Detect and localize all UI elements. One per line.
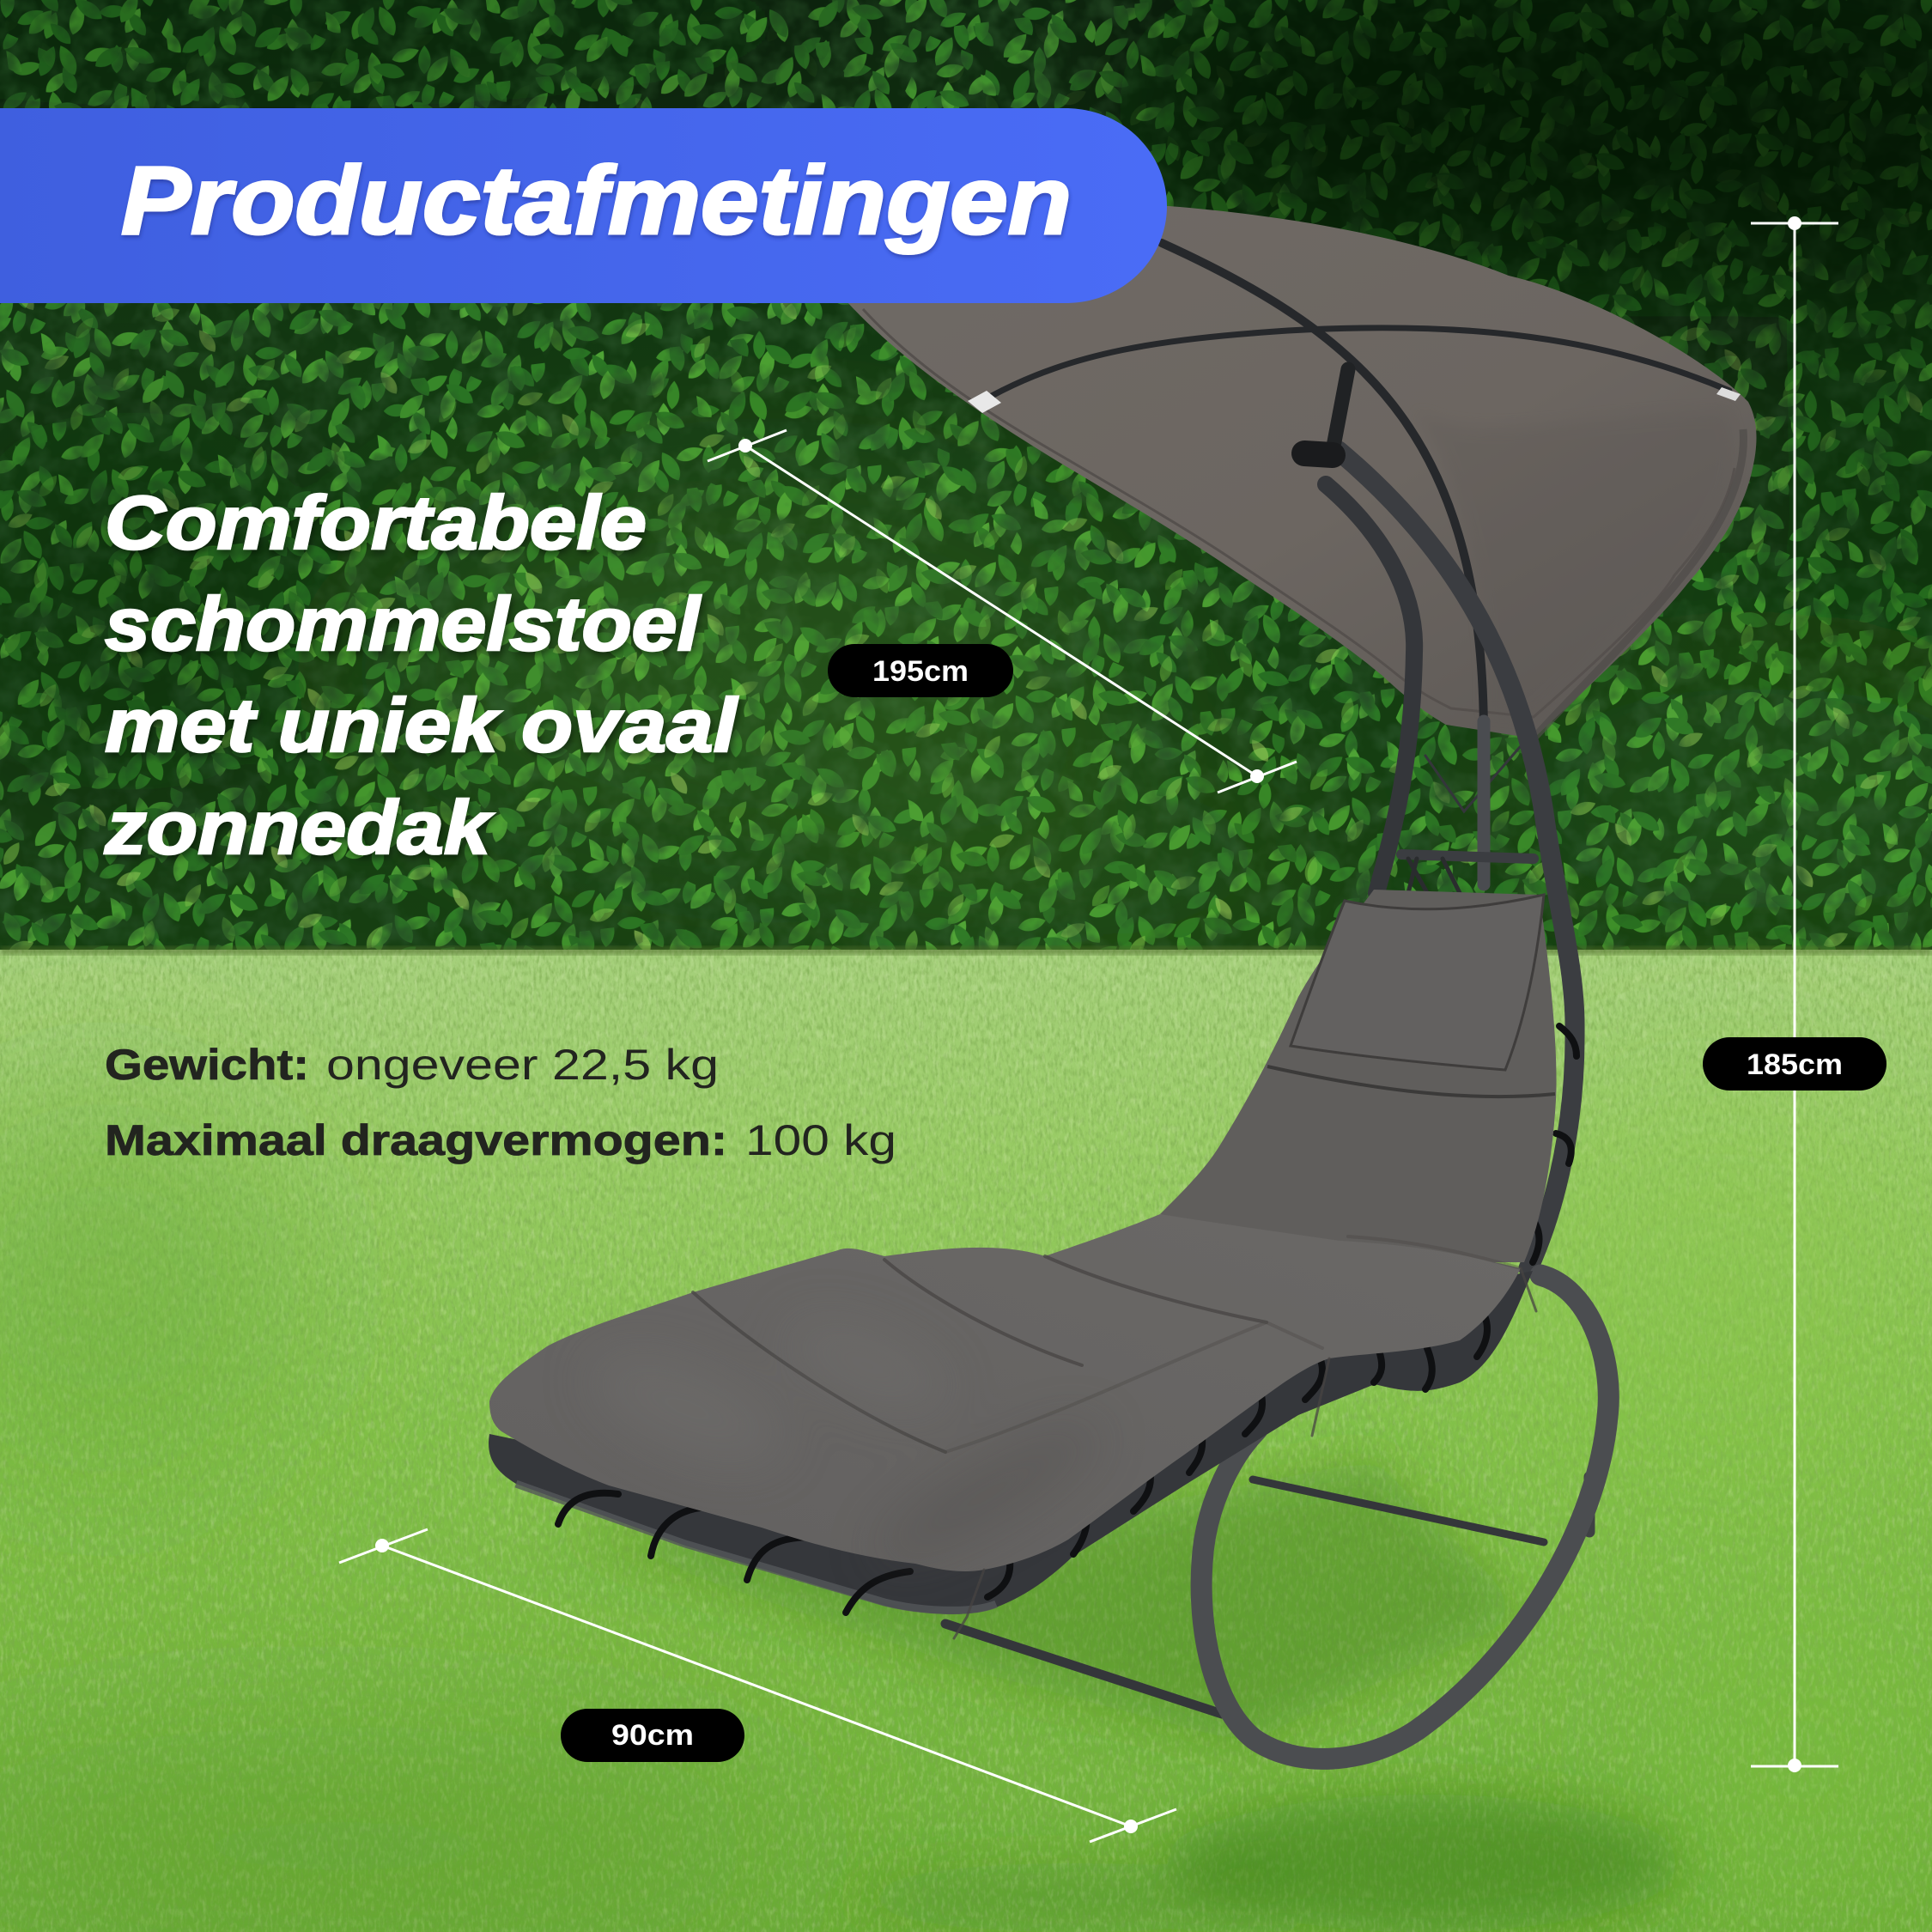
specs text: 100 kg (745, 1116, 896, 1164)
dimension: canopy depth line (708, 430, 1297, 793)
heading: product description: Comfortabele (105, 480, 647, 565)
rocker runner (1201, 1275, 1608, 1759)
dimension: width line (339, 1529, 1176, 1842)
label: 90cm (561, 1709, 744, 1762)
background: lawn (0, 946, 1932, 1932)
frame straps (558, 1026, 1577, 1613)
heading: product description: zonnedak (104, 785, 494, 870)
seat cushion (489, 1214, 1521, 1571)
heading: product description: met uniek ovaal (105, 683, 738, 768)
dimension: height line (1751, 216, 1838, 1772)
rear pole stub and ground bars (945, 747, 1589, 1714)
title banner (0, 108, 1167, 303)
specs text: Maximaal draagvermogen: (105, 1116, 727, 1164)
cushion seams (693, 1236, 1536, 1638)
label: 185cm: 185cm (1747, 1048, 1843, 1081)
specs text: Gewicht: (105, 1041, 309, 1089)
label: 195cm (828, 644, 1013, 697)
title banner: Productafmetingen (121, 147, 1072, 254)
background: hedge (0, 0, 1932, 953)
canopy ribs (992, 243, 1729, 738)
ground shadows under chair (550, 1460, 1683, 1932)
specs text: ongeveer 22,5 kg (326, 1041, 719, 1089)
specs text (105, 1041, 896, 1164)
label: 185cm (1703, 1037, 1886, 1091)
product photo: canopy chair (489, 206, 1757, 1759)
label: 195cm: 195cm (872, 655, 969, 688)
frame poles (1304, 369, 1575, 1268)
heading: product description (104, 480, 738, 870)
lounger frame (489, 1271, 1533, 1614)
cushion shading (575, 1301, 1114, 1584)
seat back cushion (1160, 890, 1557, 1262)
label: 90cm: 90cm (611, 1719, 694, 1752)
canopy (846, 206, 1757, 738)
heading: product description: schommelstoel (105, 581, 702, 666)
pillow (1291, 895, 1544, 1070)
